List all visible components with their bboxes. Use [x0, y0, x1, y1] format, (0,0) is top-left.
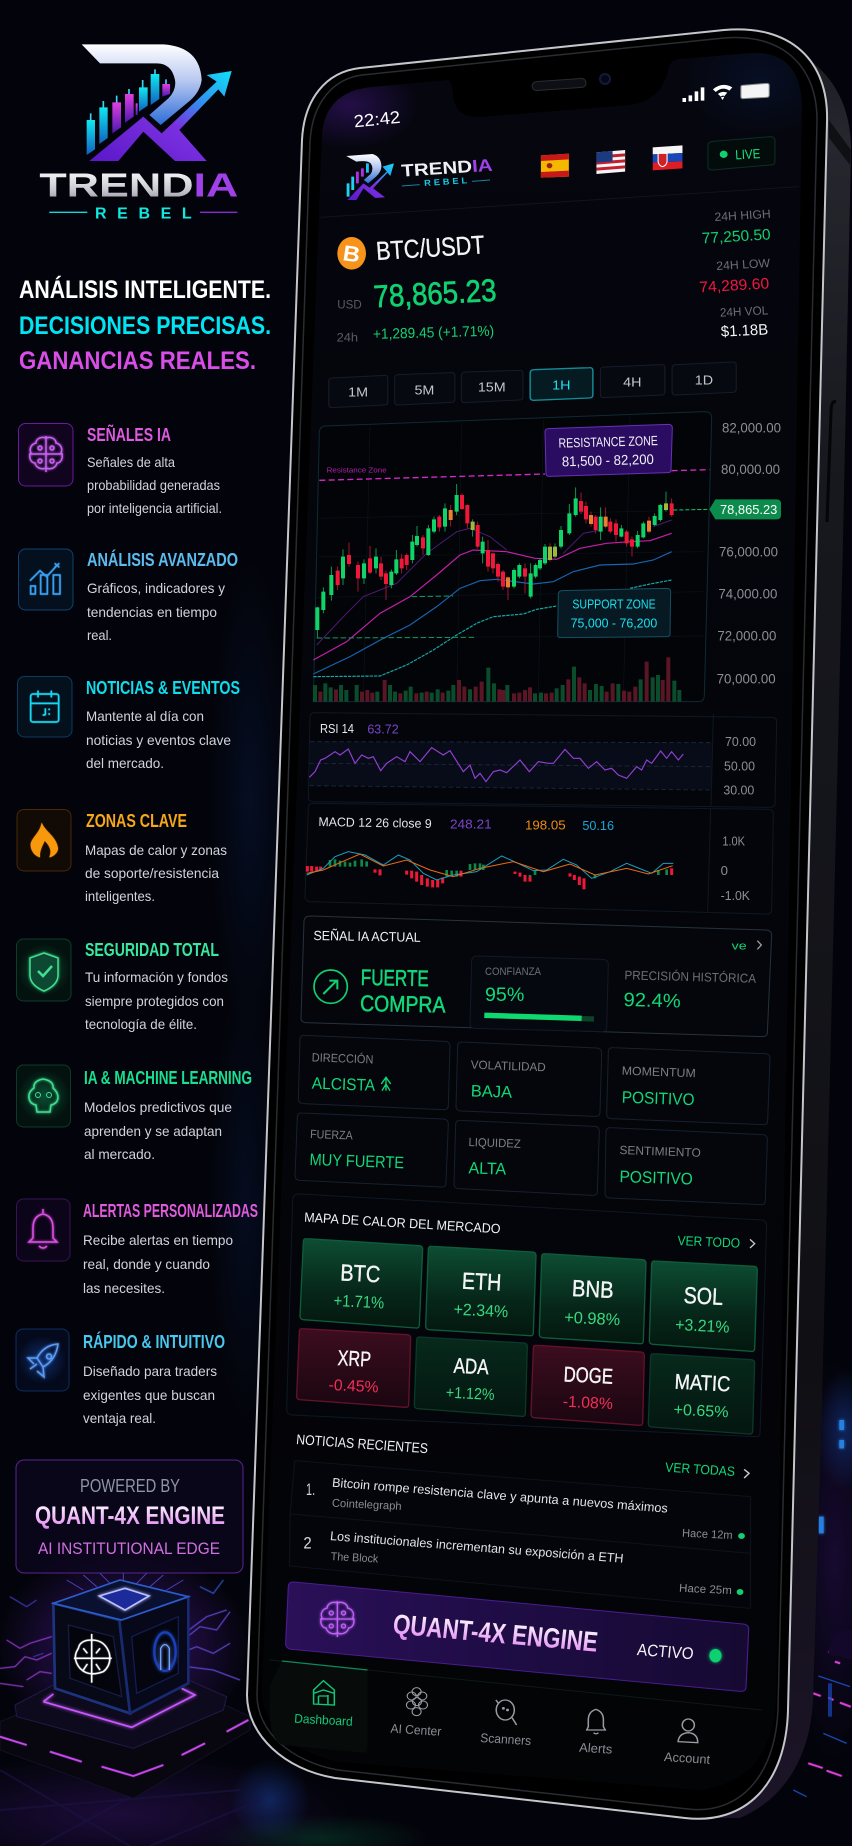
cube right face [119, 1597, 188, 1713]
metric: momentum: MOMENTUM [622, 1064, 696, 1080]
price axis labels: 74,000.00 [718, 585, 778, 601]
view all news link: VER TODAS [665, 1460, 735, 1480]
title: ALERTAS PERSONALIZADAS [83, 1201, 258, 1221]
lock emblem [154, 1632, 176, 1671]
metric: sentimiento [605, 1128, 767, 1205]
feature: rápido e intuitivo [16, 1329, 225, 1426]
title: SEÑALES IA [87, 424, 171, 445]
icon: shield [16, 939, 71, 1001]
lower platform [0, 1693, 250, 1798]
main candlestick chart [313, 412, 781, 702]
green candle wicks [317, 484, 666, 638]
clock: 22:42 [353, 107, 401, 131]
description [87, 454, 222, 516]
description: siempre protegidos con [85, 993, 224, 1009]
description: tendencias en tiempo [87, 604, 217, 620]
accuracy metric: 92.4% [623, 990, 681, 1012]
cube left inner panel [68, 1625, 122, 1697]
energy rays [67, 1573, 183, 1590]
resistance zone callout: 81,500 - 82,200 [562, 451, 654, 469]
cell: BTC [300, 1239, 423, 1328]
chart frame [313, 412, 712, 702]
title: IA & MACHINE LEARNING [84, 1068, 252, 1088]
red candle wicks [338, 493, 672, 600]
logo mark: candles [87, 69, 170, 155]
headline: GANANCIAS REALES. [19, 347, 256, 375]
brain emblem [74, 1634, 112, 1683]
news row 1 [290, 1461, 751, 1553]
description: las necesites. [83, 1280, 165, 1296]
support dashed lines [317, 596, 477, 638]
confidence card [470, 956, 608, 1032]
live badge: LIVE [735, 146, 761, 162]
cell: ETH: ETH [461, 1268, 502, 1296]
description [87, 580, 225, 643]
MACD panel: 0 [721, 864, 728, 878]
price change: +1,289.45 (+1.71%) [373, 323, 494, 343]
description: Mantente al día con [86, 708, 204, 724]
description: Diseñado para traders [83, 1363, 217, 1379]
timeframe tabs: 4H [623, 374, 641, 390]
engine banner [286, 1582, 749, 1691]
resistance line [319, 470, 709, 480]
flag: Slovakia [653, 145, 682, 170]
orange candle bodies [451, 510, 649, 587]
mini wordmark: TRENDIA [401, 155, 493, 181]
support zone callout: SUPPORT ZONE [572, 597, 656, 611]
price axis labels: 72,000.00 [717, 628, 777, 644]
price axis labels: 76,000.00 [719, 544, 778, 560]
metric: sentimiento: SENTIMIENTO [619, 1143, 701, 1160]
engine name: QUANT-4X ENGINE [35, 1502, 225, 1530]
news row 2 [289, 1514, 751, 1608]
icon: calendar [18, 676, 72, 737]
feature: zonas clave [17, 810, 227, 904]
logo mark: R [82, 44, 202, 125]
cell: BNB [539, 1254, 646, 1344]
headline: ANÁLISIS INTELIGENTE. [19, 275, 271, 304]
logo wordmark: TREND IA [39, 168, 238, 205]
navigation bar [269, 1660, 762, 1767]
title: ZONAS CLAVE [86, 811, 187, 831]
white neon bar [56, 1631, 62, 1672]
feature: seguridad total [16, 939, 228, 1032]
mini subtitle: REBEL [424, 175, 468, 188]
green candle bodies [317, 495, 660, 630]
description: inteligentes. [85, 888, 155, 904]
signal bars [682, 87, 704, 102]
metric: volatilidad [456, 1042, 602, 1116]
description [86, 708, 231, 771]
upper platform [15, 1680, 227, 1748]
signal value: FUERTE [361, 964, 429, 991]
feature: análisis avanzado [18, 549, 238, 643]
signal panel: COMPRA [360, 990, 446, 1017]
active label: ACTIVO [636, 1640, 694, 1663]
cell: MATIC [648, 1354, 755, 1434]
heat map heading: MAPA DE CALOR DEL MERCADO [304, 1210, 501, 1236]
metric: dirección [298, 1035, 450, 1110]
phone [247, 20, 851, 1819]
moving average: pink [313, 533, 672, 660]
description: al mercado. [84, 1146, 155, 1162]
description: tecnología de élite. [85, 1016, 197, 1032]
title: SEGURIDAD TOTAL [85, 940, 219, 960]
timeframe tabs: 15M [478, 379, 506, 395]
RSI panel: 70.00 [725, 734, 756, 749]
description: del mercado. [86, 755, 164, 771]
tab: scanners [480, 1700, 532, 1748]
tab: dashboard [294, 1681, 353, 1729]
battery icon [741, 83, 769, 99]
tab: alerts: Alerts [579, 1740, 613, 1757]
news row 2: Hace 25m [679, 1581, 732, 1597]
resistance small caption: Resistance Zone [327, 466, 387, 475]
metric: sentimiento: POSITIVO [619, 1167, 693, 1189]
engine tagline: AI INSTITUTIONAL EDGE [38, 1539, 220, 1558]
icon: robot head [16, 1065, 70, 1127]
pair name: BTC/USDT [375, 230, 486, 266]
metric: liquidez: ALTA [468, 1158, 507, 1179]
RSI panel: 30.00 [723, 783, 754, 798]
powered by box [16, 1460, 243, 1573]
logo subtitle: REBEL [95, 205, 192, 222]
circuit traces [0, 1580, 240, 1687]
tab: account: Account [664, 1750, 711, 1767]
description: por inteligencia artificial. [87, 500, 222, 516]
timeframe tabs: 1H [552, 377, 570, 392]
24h stats: 74,289.60 [699, 276, 770, 296]
price: 78,865.23 [372, 273, 497, 314]
illustration: quant engine cube [0, 1547, 250, 1798]
inner bezel line [257, 38, 817, 1810]
description: Recibe alertas en tiempo [83, 1232, 233, 1248]
status and header area [320, 83, 799, 408]
24h stats: 24H VOL [720, 304, 769, 320]
24h stats: 24H LOW [716, 256, 771, 273]
cell: BNB: BNB [571, 1275, 614, 1303]
metric: momentum [607, 1048, 770, 1125]
news row 2: The Block [330, 1550, 380, 1565]
side frame shading [829, 120, 851, 165]
mini logo [346, 154, 394, 200]
MACD panel: MACD 12 26 close 9 [318, 815, 432, 831]
current price tag [709, 499, 781, 519]
header divider [320, 187, 799, 217]
metric: volatilidad: BAJA [471, 1081, 513, 1102]
timeframe tabs: 5M [414, 382, 434, 397]
description [85, 969, 228, 1032]
description: Mapas de calor y zonas [85, 842, 227, 858]
description: probabilidad generadas [87, 477, 220, 493]
description: exigentes que buscan [83, 1387, 215, 1403]
MACD panel: 248.21 [450, 816, 492, 831]
feature: IA y machine learning [16, 1065, 252, 1162]
red candle bodies [338, 495, 672, 587]
bitcoin icon: B [341, 240, 362, 267]
news row 2: 2 [303, 1533, 312, 1552]
description: de soporte/resistencia [85, 865, 219, 881]
live badge [708, 137, 775, 170]
cell: DOGE: DOGE [563, 1362, 614, 1389]
engine brain icon [320, 1601, 355, 1637]
accuracy metric: PRECISIÓN HISTÓRICA [624, 967, 757, 986]
resistance zone callout [545, 424, 672, 476]
description: aprenden y se adaptan [84, 1123, 222, 1139]
tab: dashboard: Dashboard [294, 1711, 353, 1729]
description: noticias y eventos clave [86, 732, 231, 748]
speaker [532, 78, 586, 91]
current price tag: 78,865.23 [720, 502, 777, 517]
powered by label: POWERED BY [80, 1476, 180, 1496]
description: real, donde y cuando [83, 1256, 210, 1272]
MACD panel: -1.0K [721, 889, 751, 903]
tab: account [664, 1719, 711, 1767]
cell: MATIC: +0.65% [673, 1402, 729, 1421]
price axis labels: 82,000.00 [722, 420, 781, 436]
background glows [0, 560, 852, 1846]
cell: ADA: ADA [453, 1354, 490, 1379]
metric: liquidez: LIQUIDEZ [468, 1135, 521, 1151]
moving average: cyan [313, 580, 672, 677]
cell: ADA: +1.12% [445, 1385, 495, 1404]
24h stats [699, 207, 771, 341]
cell: ETH [426, 1246, 536, 1336]
news heading: NOTICIAS RECIENTES [296, 1432, 429, 1457]
confidence card: 95% [485, 985, 524, 1006]
cell: ADA [414, 1337, 527, 1416]
cell: SOL [649, 1261, 757, 1351]
current price line [673, 508, 709, 511]
right background neon details [793, 1420, 852, 1797]
metric: fuerza: FUERZA [310, 1127, 353, 1142]
24h stats: 77,250.50 [701, 227, 771, 247]
MACD panel [305, 803, 773, 914]
signal status mark: ve [732, 940, 747, 952]
cell: DOGE: -1.08% [562, 1394, 613, 1413]
MACD panel: 198.05 [525, 817, 566, 832]
news row 1: 1. [306, 1480, 315, 1499]
description: Tu información y fondos [85, 969, 228, 985]
description: ventaja real. [83, 1410, 156, 1426]
wifi icon [713, 85, 732, 100]
headline: DECISIONES PRECISAS. [19, 312, 271, 340]
logo mark: arrow [89, 71, 232, 161]
description: Modelos predictivos que [84, 1099, 232, 1115]
24h stats: $1.18B [720, 322, 769, 341]
red volume bars [320, 657, 668, 702]
cube left face [53, 1603, 130, 1713]
cube right inner panel [132, 1617, 178, 1693]
cell: SOL: SOL [683, 1282, 724, 1310]
news row 2: Los institucionales incrementan su exposición a ETH [330, 1529, 624, 1565]
heat map panel [287, 1194, 767, 1437]
cell: SOL: +3.21% [675, 1315, 730, 1337]
feature: señales IA [18, 424, 222, 516]
MACD panel: 50.16 [582, 818, 614, 833]
timeframe tabs [329, 362, 736, 408]
news row 1: Bitcoin rompe resistencia clave y apunta a nuevos máximos [331, 1475, 669, 1515]
feature: noticias y eventos [18, 676, 240, 771]
active dot [709, 1649, 722, 1662]
signal arrow icon [314, 970, 347, 1003]
lower platform neon [0, 1720, 248, 1776]
tab: alerts [579, 1709, 613, 1757]
metric: dirección: ALCISTA [312, 1074, 376, 1095]
cell: DOGE [531, 1345, 644, 1425]
price axis labels: 80,000.00 [721, 461, 780, 477]
bitcoin icon [337, 237, 366, 270]
RSI panel [308, 713, 777, 807]
logo [39, 44, 238, 222]
olive candle bodies [473, 503, 666, 560]
camera [600, 74, 610, 84]
cell: MATIC: MATIC [674, 1370, 731, 1396]
icon: bell [16, 1199, 70, 1261]
cell: BNB: +0.98% [564, 1308, 621, 1329]
cell: BTC: +1.71% [333, 1291, 385, 1312]
MACD panel: 1.0K [722, 835, 745, 849]
flag: Spain [541, 154, 569, 178]
headline [19, 275, 271, 375]
cube top face [53, 1580, 188, 1620]
title: NOTICIAS & EVENTOS [86, 678, 240, 698]
price axis labels: 70,000.00 [717, 670, 776, 686]
screen top glow [322, 53, 802, 144]
phone screen [262, 53, 802, 1790]
description: Señales de alta [87, 454, 175, 470]
flag: USA [596, 150, 625, 174]
description: real. [87, 627, 112, 643]
tab: AI center: AI Center [390, 1721, 442, 1739]
tab: AI center [390, 1688, 442, 1739]
engine banner name: QUANT-4X ENGINE [391, 1609, 599, 1658]
view all link: VER TODO [677, 1233, 740, 1251]
description [83, 1363, 217, 1426]
chevron [757, 941, 761, 949]
RSI panel: RSI 14 [320, 722, 354, 736]
signal panel [301, 916, 772, 1037]
phone side frame [690, 34, 851, 1818]
feature: alertas personalizadas [16, 1199, 258, 1296]
metric: volatilidad: VOLATILIDAD [471, 1058, 546, 1074]
confidence card: CONFIANZA [485, 966, 541, 978]
resistance zone callout: RESISTANCE ZONE [558, 433, 658, 451]
metric: fuerza [295, 1113, 448, 1187]
icon: chart [18, 549, 73, 610]
floor tile lines [0, 1770, 260, 1846]
cell: BTC: BTC [340, 1259, 381, 1287]
small change label: 24h [337, 331, 358, 345]
metric: liquidez [454, 1120, 599, 1195]
description [85, 842, 227, 904]
news row 1: Cointelegraph [332, 1496, 402, 1513]
cell: XRP [297, 1329, 411, 1407]
title: RÁPIDO & INTUITIVO [83, 1331, 225, 1352]
volume button [827, 402, 836, 522]
cube top light [99, 1588, 149, 1610]
cell: ETH: +2.34% [453, 1300, 509, 1321]
RSI panel: 50.00 [724, 759, 755, 774]
metric: fuerza: MUY FUERTE [309, 1150, 404, 1172]
active tab highlight [269, 1661, 368, 1753]
phone front [247, 29, 827, 1819]
support zone callout [558, 588, 671, 638]
news, engine banner and navigation [269, 1432, 762, 1767]
metric: dirección: DIRECCIÓN [312, 1049, 374, 1066]
metric cards and heat map [287, 1035, 770, 1437]
indicators and signal [301, 713, 777, 1037]
metrics grid [295, 1035, 770, 1205]
icon: rocket [16, 1329, 69, 1391]
metric: momentum: POSITIVO [622, 1088, 695, 1109]
accuracy metric [623, 967, 757, 1012]
cube glow [0, 1547, 250, 1747]
small price unit label: USD [337, 298, 362, 311]
chart grid [315, 417, 703, 702]
RSI panel: 63.72 [367, 722, 399, 736]
tab: scanners: Scanners [480, 1731, 532, 1748]
price axis labels [717, 420, 781, 686]
cell: XRP: -0.45% [328, 1377, 379, 1396]
icon: brain [18, 424, 73, 486]
24h stats: 24H HIGH [714, 207, 771, 224]
description [84, 1099, 232, 1162]
title: ANÁLISIS AVANZADO [87, 549, 238, 570]
description: Gráficos, indicadores y [87, 580, 225, 596]
moving average: purple [317, 520, 672, 645]
timeframe tabs: 1D [695, 372, 713, 387]
icon: flame [17, 810, 71, 871]
green volume bars [315, 667, 679, 702]
upper platform neon [43, 1688, 195, 1727]
cell: XRP: XRP [337, 1346, 372, 1372]
description [83, 1232, 233, 1296]
signal heading: SEÑAL IA ACTUAL [313, 928, 421, 945]
support zone callout: 75,000 - 76,200 [571, 615, 657, 630]
news row 1: Hace 12m [682, 1526, 733, 1542]
timeframe tabs: 1M [348, 384, 368, 400]
moving average: blue [313, 552, 672, 674]
